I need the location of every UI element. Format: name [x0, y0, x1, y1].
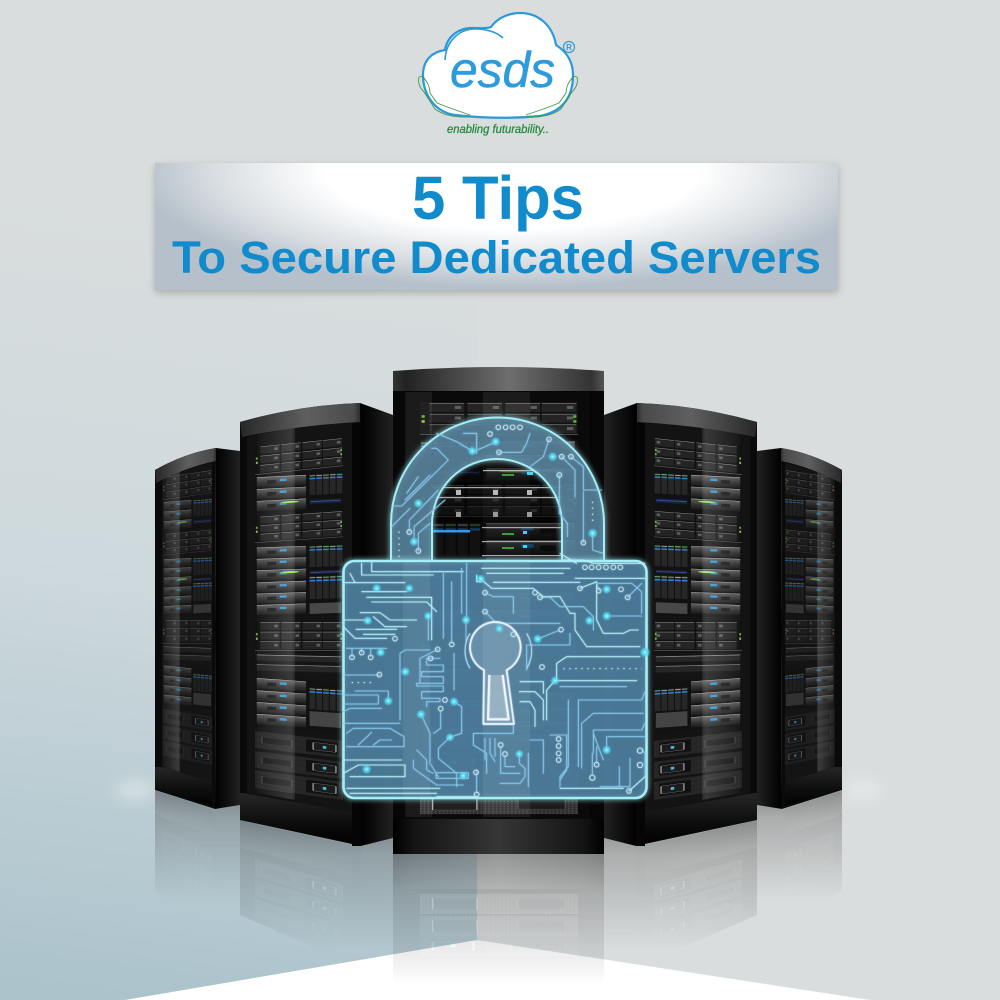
logo cloud: [423, 13, 573, 118]
circuit ring nodes: [350, 425, 643, 797]
reflections of the server racks: [155, 790, 842, 971]
server rack: inner right: [604, 403, 757, 846]
rack details seen through the padlock hole: [432, 470, 563, 556]
padlock shackle: [391, 418, 604, 561]
heading line 2: To Secure Dedicated Servers: [172, 232, 821, 283]
digital padlock: [343, 418, 650, 798]
server rack: center: [393, 367, 604, 854]
logo hands: [419, 76, 577, 117]
glowing circuit dots: [362, 437, 650, 780]
title banner: [155, 163, 838, 290]
logo tagline: enabling futurability..: [447, 124, 549, 136]
keyhole: [465, 622, 532, 724]
banner panel: [155, 163, 838, 290]
registered mark: [564, 42, 574, 52]
circuit traces: [343, 425, 650, 797]
light stripes through the padlock: [403, 563, 530, 796]
server rack: far left: [155, 448, 240, 809]
registered mark: R: [566, 43, 572, 52]
server rack: inner left: [240, 403, 393, 846]
floor glow: [115, 780, 882, 800]
server rack: far right: [757, 448, 842, 809]
heading line 1: 5 Tips: [412, 164, 584, 232]
logo cloud inner arc: [445, 29, 503, 60]
background: left blue-grey panel: [0, 0, 477, 1000]
white floor: [125, 940, 870, 1000]
padlock body: [344, 561, 646, 798]
padlock hole shade: [432, 459, 562, 561]
logo wordmark: esds: [450, 42, 555, 98]
logo: esds: [419, 13, 577, 136]
